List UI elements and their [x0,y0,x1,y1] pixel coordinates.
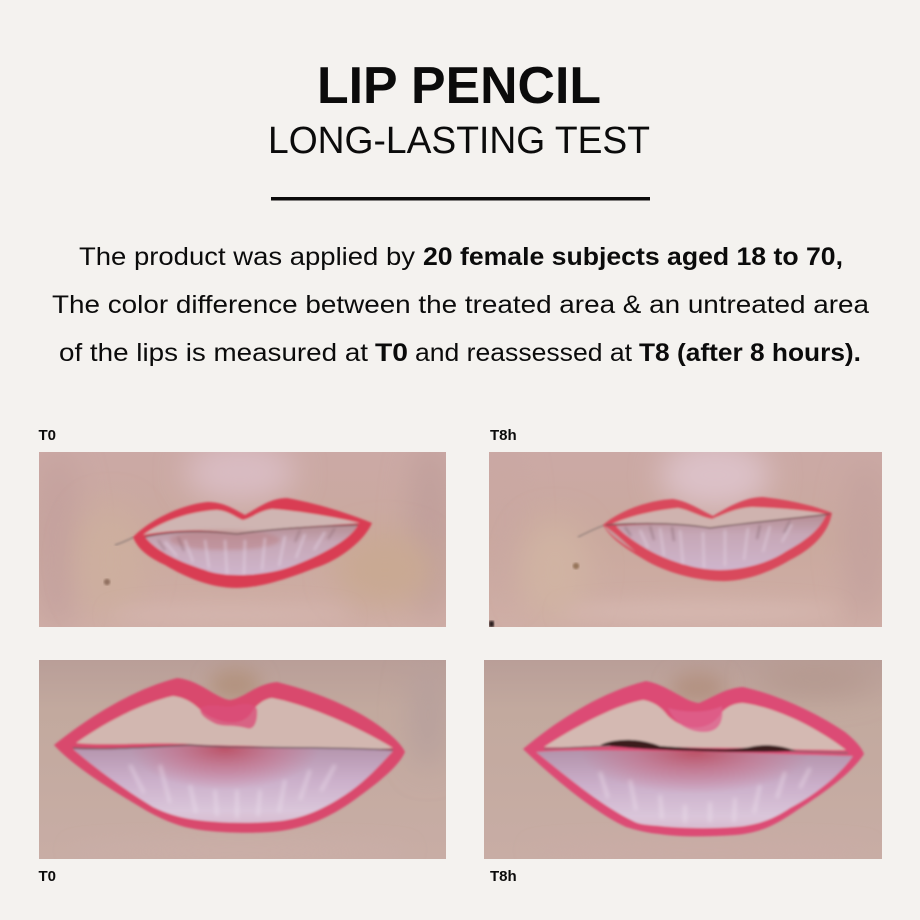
title [268,57,650,162]
description text: 20 female subjects aged 18 to 70, [423,243,843,271]
title: LONG-LASTING TEST [268,120,650,162]
lips outline [523,681,864,836]
photo: fuller lips at T0 [39,660,446,859]
label: T0 top: T0 [38,427,56,444]
heading divider [271,197,650,200]
photo: older lips at T8h [489,440,885,627]
lips outline [133,498,372,588]
description text: and reassessed at [415,339,632,367]
label: T8h bottom: T8h [490,868,517,885]
label: T0 bottom: T0 [38,868,56,885]
description text: T0 [375,339,408,367]
label: T8h top: T8h [490,427,517,444]
title: LIP PENCIL [317,57,601,115]
description text: The product was applied by [79,243,416,271]
lips outline [603,497,832,581]
description text: T8 (after 8 hours). [639,339,861,367]
photo: older lips at T0 [36,440,450,630]
description text: The color difference between the treated area & an untreated area [52,291,869,319]
lips outline [54,678,405,833]
description text [52,243,869,367]
description text: of the lips is measured at [59,339,368,367]
photo: fuller lips at T8h [484,660,882,859]
